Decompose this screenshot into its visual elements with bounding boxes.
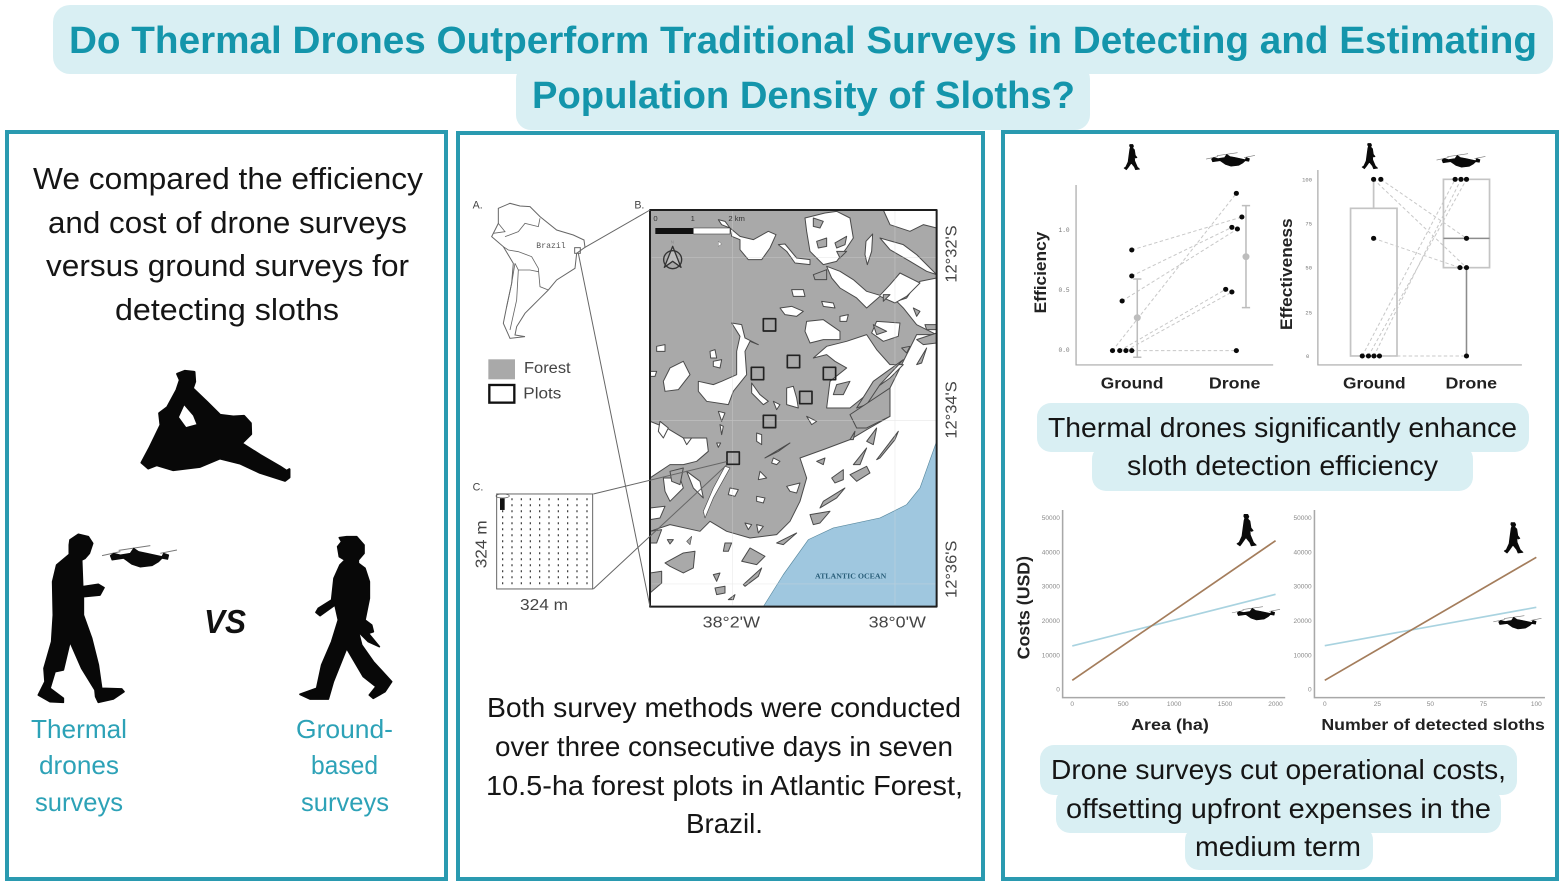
caption: operational costs: Drone surveys cut operational costs, — [1051, 754, 1506, 785]
chart: cost by area: 20000 — [1042, 618, 1060, 625]
icon: ground surveyor silhouette — [300, 537, 392, 699]
panel: study area — [458, 133, 983, 879]
chart: cost by detected sloths: 0 — [1308, 687, 1312, 694]
methods text — [486, 692, 963, 839]
chart: effectiveness: 25 — [1305, 309, 1312, 316]
scale bar — [653, 214, 745, 234]
map connectors — [578, 210, 727, 607]
caption: operational costs: medium term — [1195, 831, 1361, 862]
panel letters: A. — [473, 199, 483, 211]
panel letters: B. — [634, 199, 644, 211]
panel letters — [473, 199, 644, 494]
chart: cost by detected sloths: 50000 — [1294, 515, 1312, 522]
chart: effectiveness: Effectiveness — [1279, 218, 1296, 330]
chart: cost by detected sloths: 30000 — [1294, 584, 1312, 591]
methods text: over three consecutive days in seven — [495, 731, 953, 762]
chart: cost by detected sloths: 25 — [1374, 701, 1381, 708]
intro text — [33, 161, 424, 327]
panel: study comparison — [7, 132, 446, 879]
label: ground-based surveys: Ground- — [296, 714, 393, 744]
label: thermal drones surveys — [31, 714, 127, 817]
chart: effectiveness: 0 — [1306, 353, 1309, 360]
chart: cost by area — [1013, 510, 1285, 734]
intro text: detecting sloths — [115, 292, 339, 327]
label: thermal drones surveys: surveys — [35, 787, 123, 817]
chart: cost by detected sloths — [1294, 510, 1545, 734]
chart: efficiency: Ground — [1101, 375, 1163, 392]
chart: cost by detected sloths: 0 — [1323, 701, 1327, 708]
chart: cost by detected sloths: 50 — [1427, 701, 1434, 708]
chart: effectiveness: Drone — [1446, 375, 1497, 392]
label: ground-based surveys — [296, 714, 393, 817]
chart: cost by detected sloths: 20000 — [1294, 618, 1312, 625]
chart: cost by detected sloths: 75 — [1480, 701, 1487, 708]
title: Do Thermal Drones Outperform Traditional Surveys in Detecting and Estimating — [69, 20, 1537, 62]
coordinate labels: 38°0'W — [869, 614, 927, 631]
north and east clearings — [805, 211, 853, 265]
forest fragments — [650, 218, 937, 600]
panel: results — [1003, 132, 1557, 879]
inset C: plot transects — [473, 494, 593, 614]
intro text: and cost of drone surveys — [48, 205, 407, 240]
label: thermal drones surveys: drones — [39, 750, 119, 780]
title: Population Density of Sloths? — [532, 75, 1075, 117]
coordinate labels — [703, 225, 961, 631]
chart: cost by area: 1500 — [1218, 701, 1233, 708]
methods text: Both survey methods were conducted — [487, 692, 961, 723]
legend: Plots — [523, 385, 562, 402]
intro text: versus ground surveys for — [46, 248, 409, 283]
chart: efficiency: Drone — [1209, 375, 1260, 392]
caption: detection efficiency: sloth detection efficiency — [1127, 450, 1438, 481]
caption: detection efficiency — [1037, 403, 1529, 491]
chart: cost by area: 50000 — [1042, 515, 1060, 522]
icon: drone — [102, 546, 177, 567]
chart: effectiveness: Ground — [1343, 375, 1406, 392]
chart: effectiveness: 75 — [1305, 220, 1312, 227]
caption: detection efficiency: Thermal drones significantly enhance — [1048, 412, 1517, 443]
chart: cost by area: 500 — [1118, 701, 1129, 708]
chart: effectiveness: 100 — [1302, 176, 1312, 183]
chart: effectiveness: 50 — [1305, 264, 1312, 271]
chart: cost by detected sloths: Number of detected sloths — [1321, 716, 1545, 734]
south clearings — [650, 421, 708, 478]
coordinate labels: 12°36'S — [944, 541, 961, 598]
caption: operational costs — [1040, 745, 1517, 870]
coastal islets — [810, 511, 830, 525]
chart: cost by detected sloths: 100 — [1531, 701, 1542, 708]
chart: efficiency: 1.0 — [1059, 227, 1070, 234]
scale bar: 0 — [653, 214, 658, 223]
legend — [488, 359, 571, 403]
map B: forest and ocean — [650, 210, 937, 607]
chart: efficiency — [1033, 144, 1273, 392]
map A: South America: Brazil — [536, 242, 566, 251]
west inlet — [698, 323, 758, 405]
chart: effectiveness — [1279, 143, 1522, 392]
survey plots — [727, 319, 836, 464]
title — [53, 5, 1553, 130]
panel letters: C. — [473, 482, 483, 494]
chart: cost by area: 0 — [1056, 687, 1060, 694]
coordinate labels: 12°32'S — [944, 225, 961, 283]
graticule — [652, 211, 936, 605]
chart: cost by area: 0 — [1070, 701, 1075, 708]
chart: cost by area: 1000 — [1167, 701, 1182, 708]
icon: sloth silhouette — [142, 371, 289, 481]
chart: cost by area: Costs (USD) — [1013, 556, 1033, 659]
chart: cost by area: 40000 — [1042, 549, 1060, 556]
forest area — [650, 210, 937, 538]
chart: efficiency: 0.5 — [1059, 287, 1070, 294]
north arrow — [664, 239, 682, 269]
methods text: 10.5-ha forest plots in Atlantic Forest, — [486, 770, 963, 801]
chart: cost by area: 10000 — [1042, 652, 1060, 659]
ocean — [763, 441, 937, 607]
chart: efficiency: Efficiency — [1033, 232, 1050, 313]
legend: Forest — [524, 360, 571, 377]
label: ground-based surveys: surveys — [301, 787, 389, 817]
chart: cost by detected sloths: 10000 — [1294, 652, 1312, 659]
icon: drone pilot silhouette — [38, 534, 124, 702]
caption: operational costs: offsetting upfront expenses in the — [1066, 793, 1491, 824]
methods text: Brazil. — [686, 808, 763, 839]
chart: efficiency: 0.0 — [1059, 347, 1070, 354]
scale bar: 1 — [691, 214, 695, 223]
label: thermal drones surveys: Thermal — [31, 714, 127, 744]
map figure annotations — [473, 199, 961, 631]
map B: forest and ocean: ATLANTIC OCEAN — [815, 573, 886, 581]
chart: cost by area: 2000 — [1268, 701, 1283, 708]
coordinate labels: 38°2'W — [703, 614, 761, 631]
inset C: plot transects: 324 m — [520, 597, 568, 614]
label: vs: VS — [204, 603, 246, 640]
inset C: plot transects: 324 m — [473, 520, 490, 568]
chart: cost by detected sloths: 40000 — [1294, 549, 1312, 556]
intro text: We compared the efficiency — [33, 161, 424, 196]
north arrow: N — [671, 239, 674, 244]
chart: cost by area: 30000 — [1042, 584, 1060, 591]
chart: cost by area: Area (ha) — [1131, 716, 1209, 734]
map A: South America — [492, 203, 585, 338]
scale bar: 2 km — [728, 214, 745, 223]
coordinate labels: 12°34'S — [944, 381, 961, 439]
label: ground-based surveys: based — [311, 750, 378, 780]
